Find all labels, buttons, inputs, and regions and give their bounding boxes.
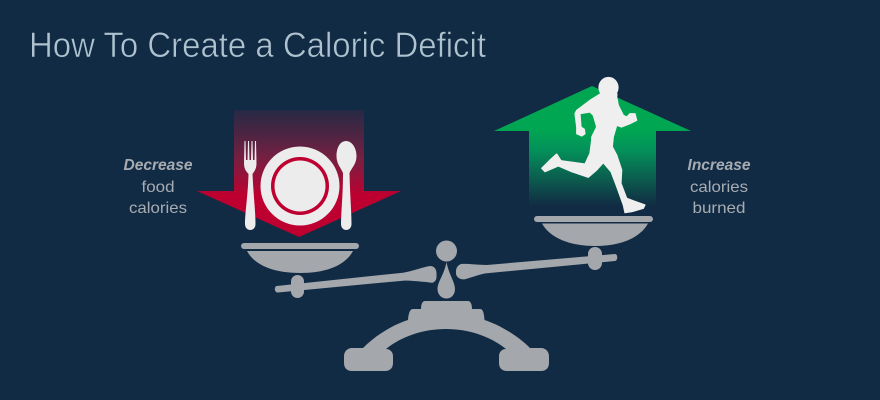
arrow: red down arrow	[197, 110, 401, 237]
label: increase calories burned: Increase	[688, 157, 751, 174]
icon: running man	[542, 78, 645, 213]
base	[344, 301, 549, 371]
scale beam and fulcrum	[275, 240, 617, 371]
label: decrease food calories: food	[142, 179, 174, 196]
left scale pan	[241, 243, 359, 273]
right peg	[588, 247, 602, 270]
label: decrease food calories	[124, 157, 193, 217]
icon: fork	[244, 141, 256, 230]
icon: spoon	[336, 141, 356, 230]
label: decrease food calories: calories	[129, 200, 187, 217]
label: increase calories burned: burned	[692, 200, 746, 217]
right beam arm	[456, 254, 617, 279]
label: increase calories burned: calories	[690, 179, 748, 196]
right scale pan	[534, 216, 653, 246]
label: decrease food calories: Decrease	[124, 157, 193, 174]
label: increase calories burned	[688, 157, 751, 217]
pivot teardrop	[438, 262, 455, 298]
left peg	[291, 275, 304, 298]
icon: plate	[260, 146, 340, 226]
arrow: green up arrow	[494, 86, 691, 206]
pivot ball	[436, 240, 457, 262]
left beam arm	[275, 266, 436, 292]
title: How To Create a Caloric Deficit	[29, 26, 486, 65]
